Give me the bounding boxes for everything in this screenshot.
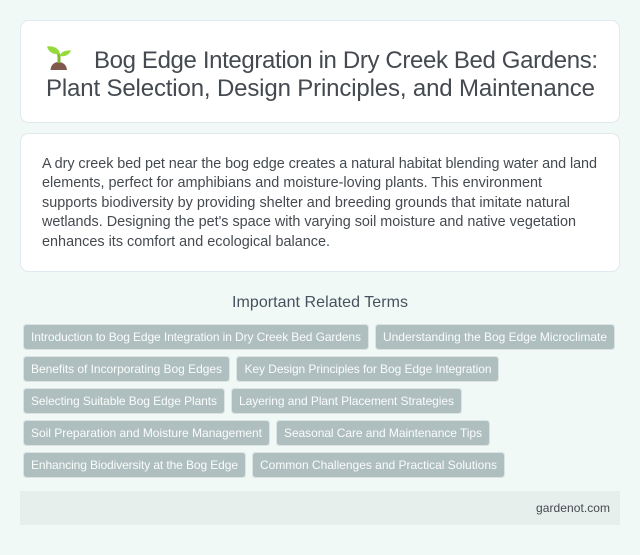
panel: title card bbox=[20, 20, 620, 122]
tag: design principles bbox=[236, 356, 498, 382]
text block: description paragraph: enhances its comfort and ecological balance. bbox=[42, 234, 330, 250]
tag: introduction bbox=[24, 324, 368, 350]
heading: important related terms: Important Related Terms bbox=[232, 294, 408, 311]
tag: microclimate: Understanding the Bog Edge Microclimate bbox=[383, 330, 607, 344]
tag: biodiversity: Enhancing Biodiversity at the Bog Edge bbox=[31, 458, 238, 472]
tag: soil preparation: Soil Preparation and Moisture Management bbox=[31, 426, 263, 440]
heading: title: Plant Selection, Design Principles, and Maintenance bbox=[46, 75, 595, 102]
heading: title bbox=[46, 47, 598, 102]
tag: seasonal care bbox=[276, 420, 490, 446]
tag: microclimate bbox=[376, 324, 614, 350]
tag: layering bbox=[232, 388, 462, 414]
tag: biodiversity bbox=[24, 452, 246, 478]
tag: soil preparation bbox=[24, 420, 270, 446]
tag: challenges: Common Challenges and Practical Solutions bbox=[260, 458, 497, 472]
text block: description paragraph: elements, perfect for amphibians and moisture-loving plants. This environment bbox=[42, 175, 542, 191]
heading: title: Bog Edge Integration in Dry Creek Bed Gardens: bbox=[94, 47, 598, 74]
footer: source bar: gardenot.com bbox=[536, 501, 610, 515]
tag: design principles: Key Design Principles for Bog Edge Integration bbox=[244, 362, 492, 376]
tag: introduction: Introduction to Bog Edge Integration in Dry Creek Bed Gardens bbox=[31, 330, 361, 344]
text block: description paragraph bbox=[41, 156, 597, 250]
tag: seasonal care: Seasonal Care and Maintenance Tips bbox=[284, 426, 482, 440]
tag: layering: Layering and Plant Placement Strategies bbox=[239, 394, 454, 408]
tag: selecting plants bbox=[24, 388, 224, 414]
tag: benefits: Benefits of Incorporating Bog Edges bbox=[31, 362, 222, 376]
text block: description paragraph: wetlands. Designing the pet's space with varying soil moisture and native vegetation bbox=[41, 214, 576, 230]
tag: benefits bbox=[24, 356, 230, 382]
footer: source bar bbox=[20, 491, 620, 525]
text block: description paragraph: A dry creek bed pet near the bog edge creates a natural habitat blending water and land bbox=[42, 156, 597, 172]
panel: description bbox=[20, 134, 620, 272]
tag: selecting plants: Selecting Suitable Bog Edge Plants bbox=[31, 394, 217, 408]
icon: sprout bbox=[47, 46, 71, 70]
tag: challenges bbox=[252, 452, 504, 478]
text block: description paragraph: supports biodiversity by providing shelter and breeding grounds that imitate natural bbox=[42, 195, 570, 211]
tag list: related terms bbox=[24, 324, 614, 478]
